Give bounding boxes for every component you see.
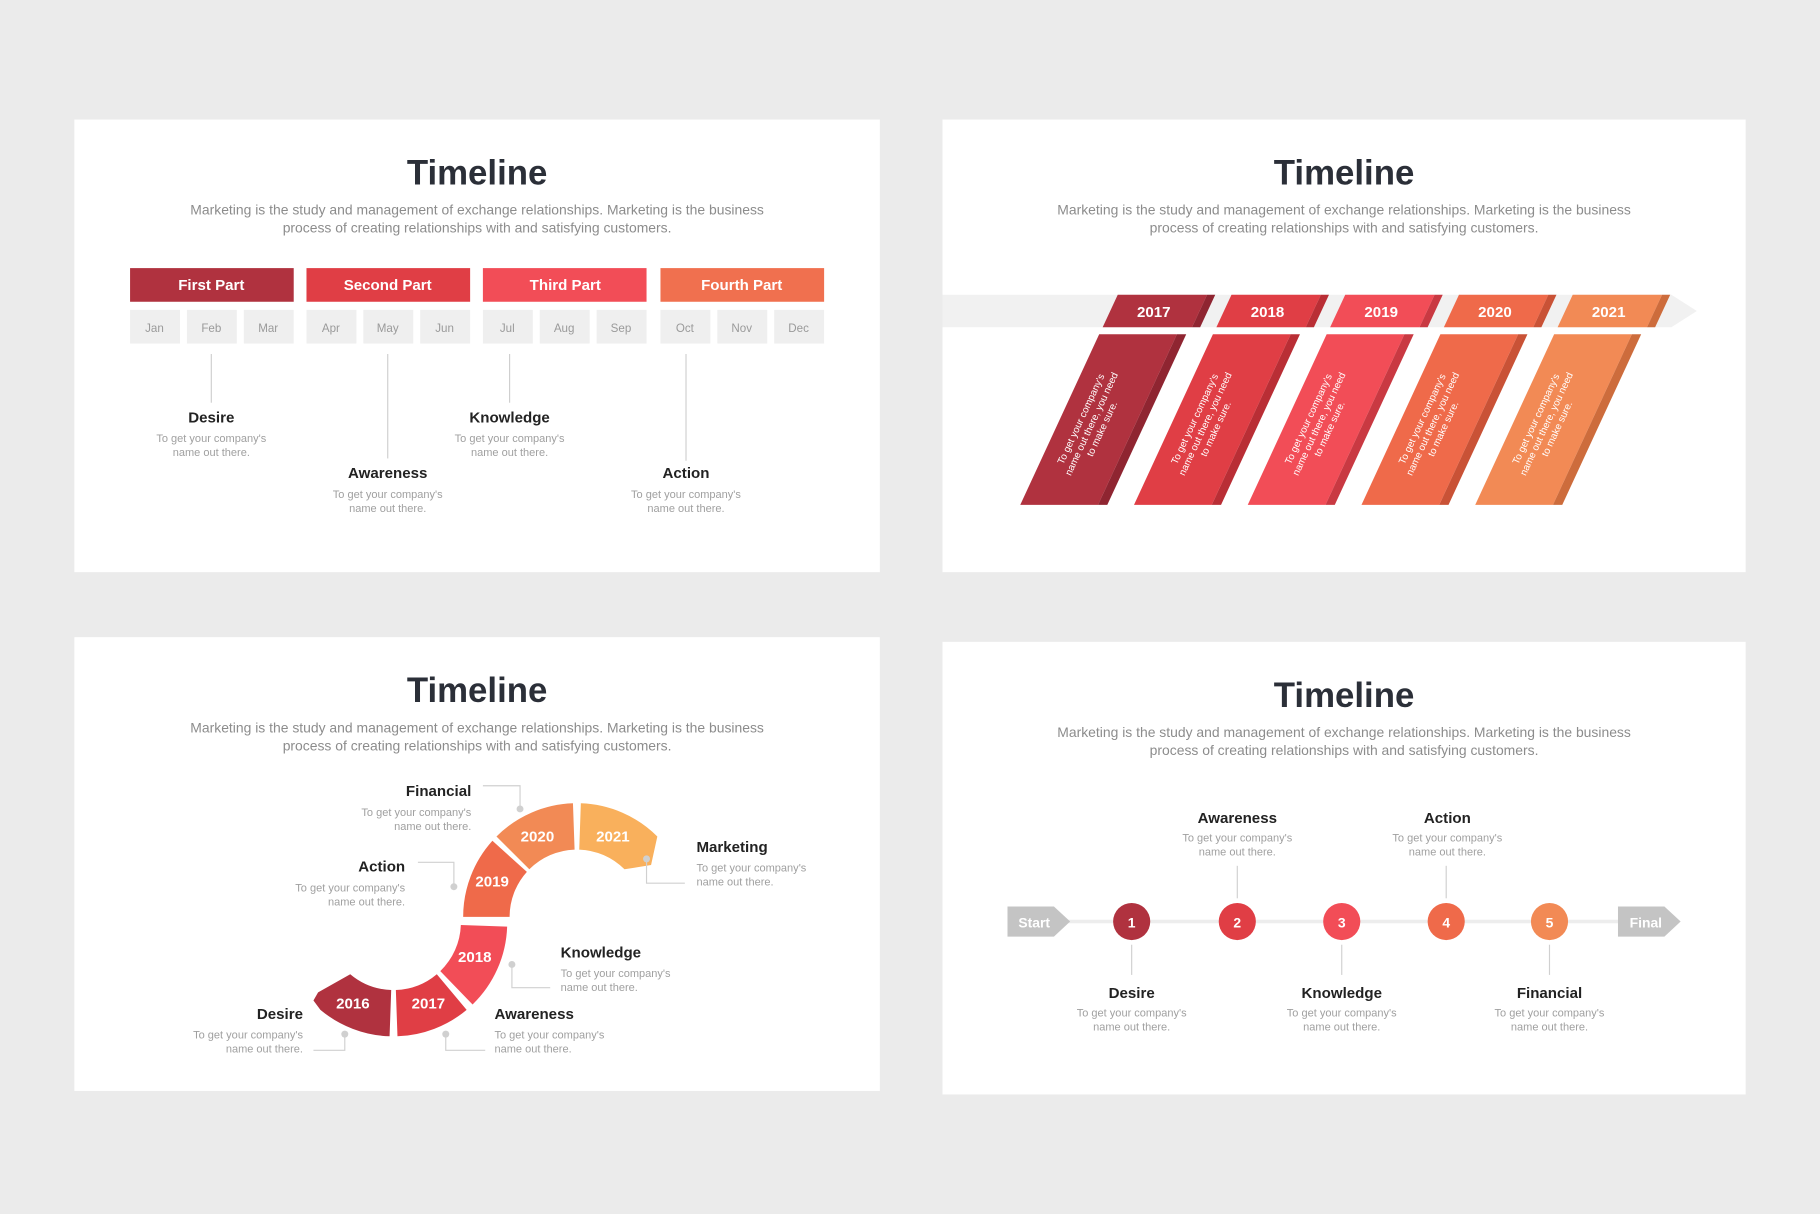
arrow band	[942, 295, 1697, 327]
S-curve segments: 2020	[521, 828, 554, 845]
step labels: Action	[1424, 810, 1471, 827]
curve labels: To get your company's	[295, 882, 405, 894]
panel: top-right slanted years	[942, 120, 1746, 572]
curve labels: name out there.	[394, 821, 471, 833]
numbered circles	[1113, 903, 1568, 940]
month boxes: Jun	[435, 322, 454, 335]
step labels: To get your company's	[1182, 832, 1292, 844]
month boxes: May	[377, 322, 399, 335]
panel: top-left timeline	[74, 120, 880, 572]
S-curve segments: 2017	[412, 996, 445, 1013]
year bars: To get your company's	[1397, 372, 1449, 466]
subtitle: Marketing is the study and management of exchange relationships. Marketing is the business	[1057, 202, 1631, 218]
start / final arrows	[1007, 906, 1681, 937]
curve labels: Action	[358, 859, 405, 876]
milestone labels: name out there.	[349, 503, 426, 515]
milestone labels: To get your company's	[156, 433, 266, 445]
month boxes: Feb	[201, 322, 221, 335]
curve labels: Knowledge	[561, 945, 641, 962]
milestone labels: name out there.	[173, 447, 250, 459]
year bars: name out there, you need	[1518, 371, 1576, 477]
milestone labels: Action	[663, 465, 709, 482]
curve labels: To get your company's	[495, 1030, 604, 1042]
S-curve segments: 2018	[458, 949, 492, 966]
month boxes: Jul	[500, 322, 515, 335]
year bars: to make sure.	[1085, 400, 1120, 459]
title: Timeline	[407, 671, 547, 710]
year bars: To get your company's	[1511, 372, 1562, 466]
year bars: 2021	[1592, 304, 1625, 321]
year bars: to make sure.	[1540, 400, 1575, 459]
milestone labels: name out there.	[647, 503, 725, 515]
title: Timeline	[1274, 154, 1414, 193]
month boxes: Aug	[554, 322, 574, 335]
year bars: name out there, you need	[1405, 371, 1462, 477]
step labels: Desire	[1109, 985, 1155, 1002]
year bars: 2020	[1478, 304, 1512, 321]
year bars: 2017	[1137, 304, 1171, 321]
numbered circles: 4	[1442, 914, 1450, 930]
curve labels	[193, 783, 807, 1056]
milestone labels: To get your company's	[333, 489, 443, 501]
year bars	[1020, 295, 1670, 505]
month boxes: Nov	[731, 322, 752, 335]
curve labels: To get your company's	[193, 1030, 303, 1042]
year bars: to make sure.	[1199, 400, 1234, 459]
step labels: To get your company's	[1077, 1008, 1187, 1020]
curve labels: name out there.	[495, 1044, 572, 1056]
subtitle: Marketing is the study and management of exchange relationships. Marketing is the business	[1057, 724, 1631, 740]
part headers: Third Part	[530, 277, 601, 294]
milestone labels: Knowledge	[469, 409, 550, 426]
numbered circles: 5	[1546, 914, 1554, 930]
step labels: Financial	[1517, 985, 1582, 1002]
panel: bottom-left S-curve	[74, 637, 880, 1091]
subtitle: Marketing is the study and management of exchange relationships. Marketing is the business	[190, 202, 764, 218]
curve labels: name out there.	[561, 982, 638, 994]
step labels: Knowledge	[1302, 985, 1382, 1002]
year bars: To get your company's	[1170, 372, 1221, 466]
S-curve segments: 2016	[336, 996, 370, 1013]
year bars: to make sure.	[1313, 400, 1348, 459]
milestone labels: To get your company's	[455, 433, 565, 445]
curve labels: name out there.	[328, 896, 405, 908]
part headers	[130, 268, 824, 302]
step labels: name out there.	[1409, 846, 1486, 858]
part headers: First Part	[178, 277, 244, 294]
subtitle: Marketing is the study and management of exchange relationships. Marketing is the business	[190, 719, 764, 735]
numbered circles: 3	[1338, 914, 1346, 930]
milestone labels: To get your company's	[631, 489, 741, 501]
year bars: To get your company's	[1283, 372, 1335, 466]
step labels: name out there.	[1303, 1022, 1380, 1034]
step labels: To get your company's	[1287, 1008, 1397, 1020]
subtitle: process of creating relationships with and satisfying customers.	[283, 220, 671, 236]
month boxes: Oct	[676, 322, 695, 335]
start / final arrows: Start	[1018, 914, 1050, 930]
month boxes: Sep	[611, 322, 631, 335]
year bars: to make sure.	[1426, 400, 1462, 459]
step labels	[1077, 810, 1605, 1034]
curve labels: name out there.	[696, 877, 774, 889]
part headers: Fourth Part	[701, 277, 782, 294]
numbered circles: 2	[1233, 914, 1241, 930]
numbered circles: 1	[1128, 914, 1136, 930]
step labels: name out there.	[1199, 846, 1276, 858]
milestone labels: Awareness	[348, 465, 427, 482]
curve labels: To get your company's	[361, 807, 471, 819]
S-curve segments	[313, 803, 657, 1036]
year bars: name out there, you need	[1291, 371, 1348, 477]
step labels: To get your company's	[1495, 1008, 1604, 1020]
subtitle: process of creating relationships with and satisfying customers.	[283, 737, 671, 753]
S-curve segments: 2019	[475, 874, 509, 891]
milestone labels: Desire	[188, 409, 234, 426]
curve labels: name out there.	[226, 1044, 303, 1056]
curve labels: Awareness	[495, 1006, 574, 1023]
month boxes: Jan	[145, 322, 164, 335]
subtitle: process of creating relationships with and satisfying customers.	[1150, 742, 1538, 758]
year bars: 2019	[1364, 304, 1398, 321]
year bars: name out there, you need	[1177, 371, 1235, 477]
month boxes: Mar	[258, 322, 278, 335]
curve labels: Desire	[257, 1006, 303, 1023]
step labels: name out there.	[1093, 1022, 1170, 1034]
S-curve segments: 2021	[596, 828, 630, 845]
curve labels: To get your company's	[696, 863, 806, 875]
start / final arrows: Final	[1630, 914, 1662, 930]
title: Timeline	[1274, 676, 1414, 715]
milestone labels: name out there.	[471, 447, 548, 459]
year bars: 2018	[1251, 304, 1284, 321]
month boxes	[130, 310, 824, 344]
year bars: To get your company's	[1056, 372, 1107, 466]
step labels: Awareness	[1198, 810, 1277, 827]
title: Timeline	[407, 154, 547, 193]
curve labels: Marketing	[696, 839, 768, 856]
curve labels: To get your company's	[561, 968, 671, 980]
panel: bottom-right steps	[942, 642, 1746, 1094]
step labels: name out there.	[1511, 1022, 1588, 1034]
subtitle: process of creating relationships with and satisfying customers.	[1150, 220, 1538, 236]
month boxes: Dec	[788, 322, 809, 335]
curve labels: Financial	[406, 783, 471, 800]
step labels: To get your company's	[1392, 832, 1502, 844]
part headers: Second Part	[344, 277, 432, 294]
year bars: name out there, you need	[1063, 371, 1121, 477]
month boxes: Apr	[322, 322, 340, 335]
milestone labels	[156, 409, 741, 515]
